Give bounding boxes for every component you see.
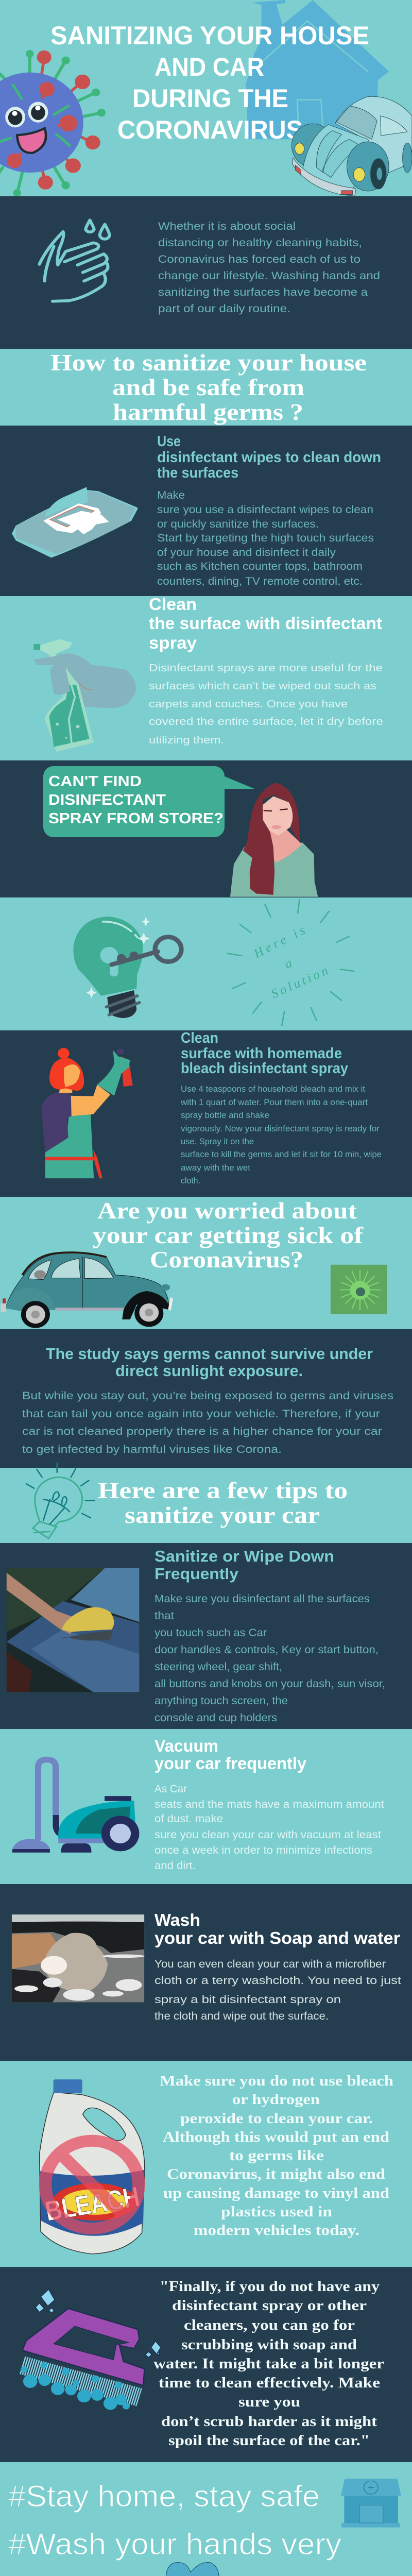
image: hand washing car with foam xyxy=(12,1914,145,2002)
text: wipes paragraph: counters, dining, TV remote control, etc. xyxy=(157,575,363,587)
text: wash paragraph: You can even clean your car with a microfiber xyxy=(154,1958,386,1970)
panel: sanitize or wipe down xyxy=(0,1543,412,1729)
text: spray paragraph: utilizing them. xyxy=(149,735,224,746)
heading: how to sanitize: How to sanitize your house xyxy=(50,350,367,376)
icon: heart in hand xyxy=(139,2562,221,2576)
panel: hashtags xyxy=(0,2462,412,2576)
heading: study says: direct sunlight exposure. xyxy=(115,1362,303,1380)
text: intro paragraph: sanitizing the surfaces have become a xyxy=(158,286,368,298)
text: bleach recipe: surface to kill the germs and let it sit for 10 min, wipe xyxy=(181,1149,382,1159)
text: bleach recipe: away with the wet xyxy=(181,1163,250,1173)
heading: are you worried: your car getting sick of xyxy=(93,1223,364,1248)
illustration: teal vintage car xyxy=(1,1252,173,1328)
text: bleach recipe xyxy=(180,1084,382,1185)
text: bleach warning: plastics used in xyxy=(221,2204,332,2220)
panel: tips heading band xyxy=(0,1463,412,1543)
text: finally quote: scrubbing with soap and xyxy=(181,2336,357,2353)
text: wipes paragraph xyxy=(157,489,374,587)
panel: disinfectant wipes xyxy=(0,426,412,596)
heading: study says xyxy=(46,1345,373,1380)
text: bleach warning: to germs like xyxy=(229,2147,324,2164)
text: bleach warning: up causing damage to vinyl and xyxy=(163,2185,389,2201)
heading: use wipes xyxy=(157,433,381,481)
heading: sanitize or wipe: Sanitize or Wipe Down xyxy=(154,1547,334,1565)
text: hashtag messages: #Wash your hands very xyxy=(8,2528,341,2561)
text: wash paragraph: spray a bit disinfectant spray on xyxy=(154,1994,341,2006)
heading: sanitize or wipe: Frequently xyxy=(154,1565,239,1583)
heading: are you worried: Are you worried about xyxy=(97,1198,357,1224)
text: wipes paragraph: of your house and disinfect it daily xyxy=(157,547,336,558)
text: study paragraph: But while you stay out, you’re being exposed to germs and viruses xyxy=(22,1390,393,1402)
illustration: crossed out bleach bottle xyxy=(40,2079,145,2254)
illustration: blue beetle car xyxy=(291,96,412,196)
text: finally quote: disinfectant spray or other xyxy=(172,2297,367,2314)
heading: vacuum xyxy=(154,1736,307,1773)
text: bleach warning: Coronavirus, it might also end xyxy=(167,2166,385,2182)
text: vacuum paragraph: of dust. make xyxy=(154,1813,223,1825)
text: finally quote: cleaners, you can go for xyxy=(184,2317,355,2333)
illustration: bulb with key xyxy=(73,917,181,1018)
text: wipes paragraph: such as Kitchen counter tops, bathroom xyxy=(157,561,363,572)
text: intro paragraph: part of our daily routine. xyxy=(158,303,290,315)
callout: speech bubble: SPRAY FROM STORE? xyxy=(48,810,224,827)
heading: how to sanitize: harmful germs ? xyxy=(113,399,303,425)
text: wash paragraph xyxy=(154,1958,401,2022)
text: wipe paragraph: you touch such as Car xyxy=(154,1627,267,1639)
heading: wash: your car with Soap and water xyxy=(154,1928,400,1947)
illustration: crossed out bleach bottle: BLEACH xyxy=(43,2181,142,2227)
panel: here is a solution xyxy=(0,897,412,1030)
text: bleach recipe: Use 4 teaspoons of household bleach and mix it xyxy=(181,1084,365,1094)
icon: blue house xyxy=(341,2479,401,2528)
callout: speech bubble xyxy=(43,766,254,837)
text: wash paragraph: cloth or a terry washcloth. You need to just xyxy=(154,1975,401,1987)
text: intro paragraph: Coronavirus has forced each of us to xyxy=(158,253,360,265)
title: CORONAVIRUS xyxy=(117,115,303,144)
heading: use wipes: the surfaces xyxy=(157,465,238,481)
text: spray paragraph: covered the entire surface, let it dry before xyxy=(149,716,383,727)
text: bleach recipe: use. Spray it on the xyxy=(181,1137,254,1146)
decoration label: rays around solution text xyxy=(228,900,354,1025)
text: finally quote: time to clean effectively. Make xyxy=(159,2375,380,2391)
heading: homemade bleach: surface with homemade xyxy=(181,1045,342,1062)
heading: homemade bleach: bleach disinfectant spray xyxy=(181,1060,348,1077)
text: bleach recipe: spray bottle and shake xyxy=(181,1110,269,1120)
heading: are you worried: Coronavirus? xyxy=(150,1247,303,1273)
heading: use wipes: disinfectant wipes to clean down xyxy=(157,449,381,466)
text: finally quote: sure you xyxy=(238,2394,300,2410)
heading: study says: The study says germs cannot survive under xyxy=(46,1345,373,1363)
text: intro paragraph: change our lifestyle. Washing hands and xyxy=(158,270,380,282)
text: bleach recipe: with 1 quart of water. Pour them into a one-quart xyxy=(180,1097,368,1107)
text: wipe paragraph: all buttons and knobs on your dash, sun visor, xyxy=(154,1678,385,1690)
icon: washing hands xyxy=(40,220,110,301)
text: wipe paragraph: console and cup holders xyxy=(154,1712,277,1724)
text: study paragraph: that can tail you once again into your vehicle. Therefore, if your xyxy=(22,1408,380,1420)
text: spray paragraph: Disinfectant sprays are more useful for the xyxy=(149,663,383,674)
text: intro paragraph: Whether it is about social xyxy=(158,221,296,232)
text: vacuum paragraph: once a week in order to minimize infections xyxy=(154,1844,372,1856)
text: wipes paragraph: or quickly sanitize the surfaces. xyxy=(157,518,319,530)
text: wash paragraph: the cloth and wipe out the surface. xyxy=(154,2010,329,2022)
icon: wipes package xyxy=(12,487,138,558)
panel: wash with soap xyxy=(0,1884,412,2061)
text: here is a solution: a xyxy=(283,956,294,972)
title: DURING THE xyxy=(132,84,288,113)
text: bleach warning: Make sure you do not use bleach xyxy=(160,2073,393,2089)
heading: wash: Wash xyxy=(154,1910,200,1929)
text: here is a solution: Solution xyxy=(269,964,330,1001)
panel: can't find spray xyxy=(0,760,412,897)
icon: vacuum cleaner xyxy=(12,1759,139,1853)
panel: title header xyxy=(0,0,412,196)
text: finally quote: "Finally, if you do not have any xyxy=(160,2278,380,2295)
panel: intro xyxy=(0,196,412,349)
heading: clean with spray xyxy=(149,595,382,652)
heading: clean with spray: spray xyxy=(149,633,197,652)
callout: speech bubble: DISINFECTANT xyxy=(48,792,166,808)
illustration: purple scrub brush xyxy=(21,2290,161,2410)
text: spray paragraph: surfaces which can’t be wiped out such as xyxy=(149,681,376,692)
text: bleach warning: modern vehicles today. xyxy=(194,2222,359,2239)
illustration: woman spraying xyxy=(41,1048,133,1178)
text: intro paragraph xyxy=(158,221,380,315)
image: green virus photo xyxy=(331,1265,387,1314)
text: here is a solution: Here is xyxy=(251,923,307,961)
text: finally quote: don’t scrub harder as it might xyxy=(161,2413,377,2430)
illustration: smiling virus xyxy=(0,52,104,195)
icon: outline bulb xyxy=(26,1463,95,1538)
heading: homemade bleach xyxy=(181,1030,348,1077)
illustration: watercolor house xyxy=(246,0,389,139)
heading: a few tips xyxy=(98,1478,348,1528)
text: wipe paragraph: door handles & controls, Key or start button, xyxy=(154,1644,379,1656)
text: wipe paragraph: that xyxy=(154,1610,174,1622)
text: study paragraph: to get infected by harmful viruses like Corona. xyxy=(22,1444,282,1455)
illustration: woman with red hair xyxy=(230,783,318,897)
heading: clean with spray: Clean xyxy=(149,595,197,614)
title: SANITIZING YOUR HOUSE xyxy=(50,21,369,50)
heading: vacuum: your car frequently xyxy=(154,1754,307,1773)
text: vacuum paragraph xyxy=(154,1783,384,1872)
text: vacuum paragraph: and dirt. xyxy=(154,1860,196,1872)
icon: hand with spray bottle xyxy=(33,639,136,752)
panel: homemade bleach spray xyxy=(0,1030,412,1197)
text: hashtag messages: #Stay home, stay safe xyxy=(8,2480,320,2513)
heading: use wipes: Use xyxy=(157,433,181,450)
title: AND CAR xyxy=(154,53,264,81)
panel: vacuum xyxy=(0,1729,412,1884)
heading: are you worried xyxy=(93,1198,364,1273)
text: study paragraph: car is not cleaned properly there is a higher chance for your car xyxy=(22,1426,382,1437)
text: intro paragraph: distancing or healthy cleaning habits, xyxy=(158,237,362,249)
text: wipes paragraph: Make xyxy=(157,489,185,501)
text: hashtag messages xyxy=(8,2480,346,2576)
text: spray paragraph: carpets and couches. Once you have xyxy=(149,699,348,710)
text: bleach recipe: vigorously. Now your disinfectant spray is ready for xyxy=(181,1124,380,1133)
heading: clean with spray: the surface with disinfectant xyxy=(149,614,382,633)
text: wipes paragraph: sure you use a disinfectant wipes to clean xyxy=(157,504,373,516)
panel: study on sunlight xyxy=(0,1329,412,1468)
text: finally quote: spoil the surface of the car." xyxy=(168,2432,370,2449)
heading: wash xyxy=(154,1910,400,1947)
heading: a few tips: Here are a few tips to xyxy=(98,1478,348,1503)
heading: how to sanitize: and be safe from xyxy=(112,375,304,400)
panel: how to sanitize heading band xyxy=(0,349,412,426)
text: wipe paragraph: steering wheel, gear shift, xyxy=(154,1661,282,1673)
text: vacuum paragraph: seats and the mats have a maximum amount xyxy=(154,1799,384,1810)
text: wipe paragraph: anything touch screen, the xyxy=(154,1695,288,1707)
text: bleach warning: Although this would put an end xyxy=(163,2129,389,2145)
panel: disinfectant spray xyxy=(0,595,412,760)
text: study paragraph xyxy=(22,1390,393,1455)
callout: speech bubble: CAN'T FIND xyxy=(48,773,142,790)
text: vacuum paragraph: sure you clean your car with vacuum at least xyxy=(154,1829,381,1841)
text: wipes paragraph: Start by targeting the high touch surfaces xyxy=(157,532,374,544)
panel: scrubbing with soap xyxy=(0,2267,412,2462)
text: finally quote: water. It might take a bit longer xyxy=(153,2355,384,2372)
text: wipe paragraph: Make sure you disinfectant all the surfaces xyxy=(154,1593,370,1605)
heading: vacuum: Vacuum xyxy=(154,1736,218,1755)
text: here is a solution xyxy=(251,923,330,1001)
text: bleach warning xyxy=(160,2073,393,2239)
text: wipe paragraph xyxy=(154,1593,385,1724)
heading: homemade bleach: Clean xyxy=(181,1030,218,1046)
panel: worried about your car xyxy=(0,1197,412,1329)
image: hand wiping car with sponge xyxy=(7,1568,139,1692)
text: spray paragraph xyxy=(149,663,383,746)
title xyxy=(50,21,369,144)
text: bleach recipe: cloth. xyxy=(181,1176,200,1185)
panel: do not use bleach xyxy=(0,2061,412,2267)
text: bleach warning: or hydrogen xyxy=(232,2091,320,2108)
text: vacuum paragraph: As Car xyxy=(154,1783,187,1795)
text: finally quote xyxy=(153,2278,384,2449)
heading: sanitize or wipe xyxy=(154,1547,334,1583)
heading: a few tips: sanitize your car xyxy=(125,1502,320,1528)
heading: how to sanitize xyxy=(50,350,367,425)
text: bleach warning: peroxide to clean your car. xyxy=(180,2110,373,2127)
